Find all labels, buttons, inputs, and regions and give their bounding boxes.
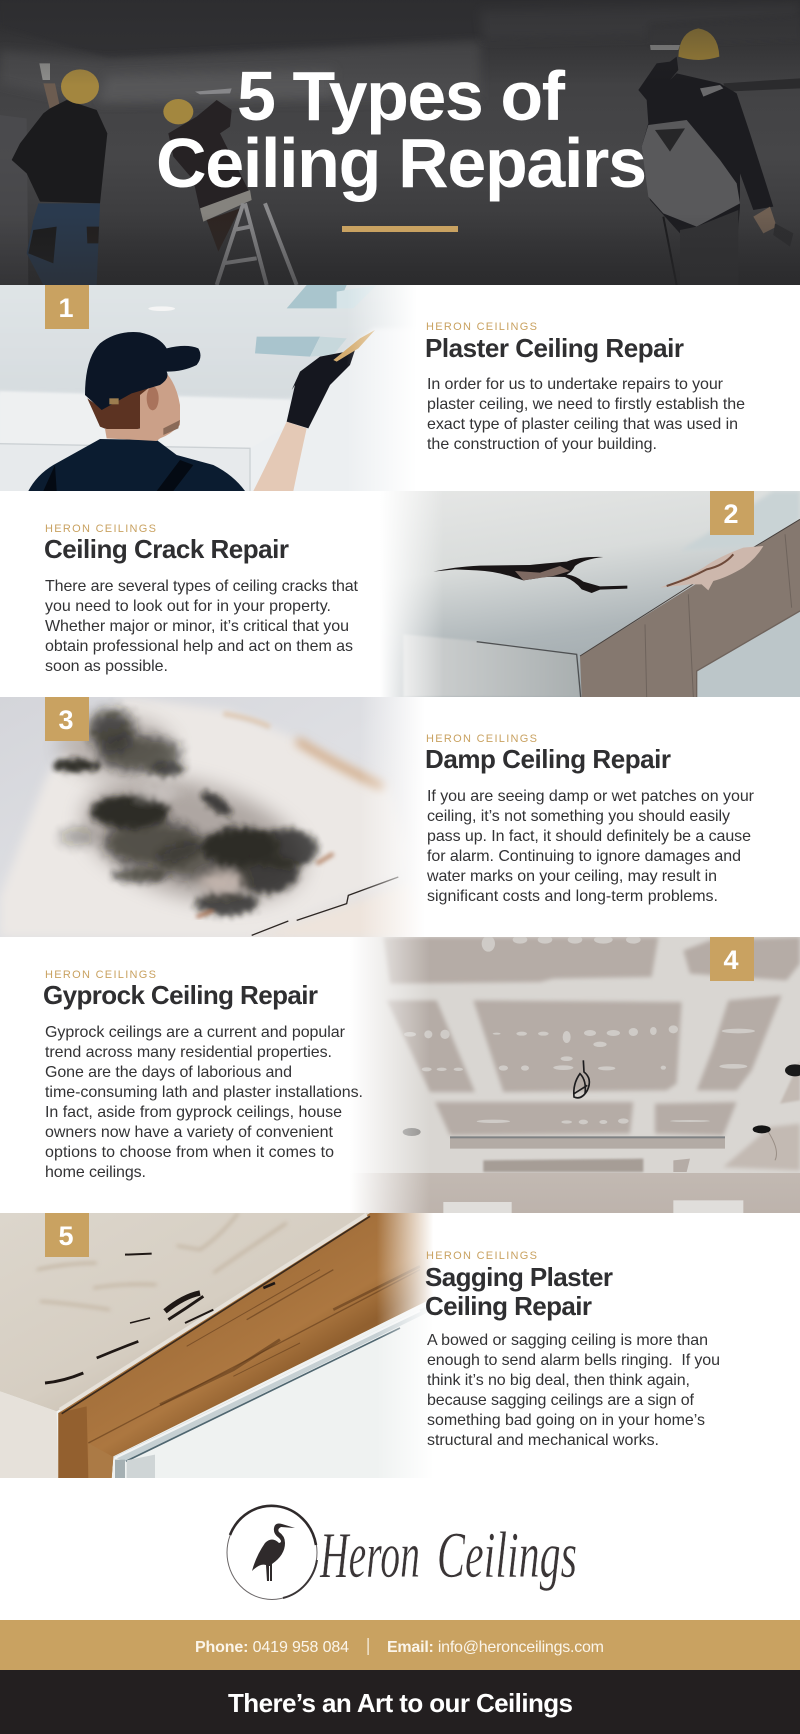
number badge 3: 3 [58,705,74,735]
hanging wire [574,1060,589,1098]
left worker [12,63,107,285]
section 1 text: Plaster Ceiling Repair [425,333,684,363]
tagline bar [0,1670,800,1734]
section 4 text: options to choose from when it comes to [45,1144,334,1161]
crack [433,557,627,593]
plaster folds [37,1213,287,1310]
contact phone: Phone: 0419 958 084 [195,1639,349,1656]
icon: heron in brush circle [227,1506,317,1600]
section 3 text: Damp Ceiling Repair [425,744,671,774]
section 3: damp ceiling repair [0,697,755,937]
plaster dabs [404,936,755,1124]
separator [368,1638,369,1655]
section 4 text: HERON CEILINGS [45,969,156,981]
damaged ceiling edge [60,1215,367,1410]
section 5 text: HERON CEILINGS [426,1250,537,1262]
section 5 text: enough to send alarm bells ringing. If you [427,1352,720,1369]
timber frame [58,1213,460,1478]
section 5: sagging plaster ceiling repair [0,1213,720,1478]
section 5 text: think it’s no big deal, then think again, [427,1372,690,1389]
contact bar [0,1620,800,1670]
number badge 2: 2 [723,499,739,529]
section 4 text: Gone are the days of laborious and [45,1064,292,1081]
man's head [87,385,160,430]
contact email: Email: info@heronceilings.com [387,1639,604,1656]
number badge 1: 1 [58,293,74,323]
section 5 text: Ceiling Repair [425,1291,592,1321]
number badge 5: 5 [58,1221,74,1251]
section 5 text: structural and mechanical works. [427,1432,659,1449]
section 5 text: Sagging Plaster [425,1262,613,1292]
photo: sagging ceiling over timber window frame [0,1213,431,1478]
section 1 text: exact type of plaster ceiling that was used in [427,416,738,433]
gold divider bar [342,226,458,232]
main title [156,57,647,202]
man's shirt [28,439,245,491]
recessed lip [450,1137,725,1149]
number badge 2 [710,491,754,535]
section 4 text: time-consuming lath and plaster installations. [45,1084,363,1101]
section 2 text: soon as possible. [45,658,168,675]
section 1: plaster ceiling repair [0,275,745,491]
section 3 text: If you are seeing damp or wet patches on your [427,788,755,805]
hero panel [0,0,800,285]
section 2 text: There are several types of ceiling cracks that [45,578,359,595]
section 1 text: In order for us to undertake repairs to your [427,376,724,393]
section 4: gyprock ceiling repair [43,936,800,1213]
section 1 text: plaster ceiling, we need to firstly establish the [427,396,745,413]
photo: cracked ceiling corner [386,491,800,697]
crack in sheet [252,877,398,935]
wood grain [160,1266,420,1405]
section 2 text: Whether major or minor, it’s critical that you [45,618,349,635]
photo: plasterer with cap [0,285,400,491]
logo: Heron Ceilings [227,1506,577,1600]
section 2: ceiling crack repair [44,491,800,697]
section 2 text: Ceiling Crack Repair [44,534,289,564]
torn plaster [660,546,763,590]
middle worker on ladder [163,88,297,285]
section 4 text: trend across many residential properties. [45,1044,332,1061]
section 4 text: Gyprock Ceiling Repair [43,980,318,1010]
section 5 text: A bowed or sagging ceiling is more than [427,1332,708,1349]
section 4 text: Gyprock ceilings are a current and popular [45,1024,346,1041]
section 5 text: because sagging ceilings are a sign of [427,1392,695,1409]
section 1 text [425,321,745,453]
section 3 text: for alarm. Continuing to ignore damages and [427,848,741,865]
arm and glove [253,422,307,491]
section 3 text: water marks on your ceiling, may result in [426,868,717,885]
section 2 text: obtain professional help and act on them as [45,638,353,655]
logo wordmark [319,1519,577,1592]
mould [53,709,318,924]
section 2 text [44,523,359,675]
main title: Ceiling Repairs [156,124,647,202]
section 1 text: HERON CEILINGS [426,321,537,333]
tagline: There’s an Art to our Ceilings [228,1688,573,1718]
section 3 text: pass up. In fact, it should definitely be a cause [427,828,751,845]
section 4 text: home ceilings. [45,1164,146,1181]
number badge 4 [710,937,754,981]
main title: 5 Types of [237,57,566,135]
section 4 text: owners now have a variety of convenient [45,1124,334,1141]
logo wordmark: Ceilings [437,1519,577,1592]
rust streak [223,714,270,727]
number badge 4: 4 [723,945,739,975]
number badge 5 [45,1213,89,1257]
section 5 text [425,1250,720,1449]
man's cap [85,332,200,410]
section 2 text: you need to look out for in your property. [45,598,331,615]
number badge 3 [45,697,89,741]
photo: gyprock ceiling with jointing [358,937,800,1213]
section 4 text [43,969,363,1181]
section 3 text: ceiling, it’s not something you should easily [427,808,730,825]
right worker [638,28,793,285]
section 3 text: significant costs and long-term problems. [427,888,718,905]
section 3 text [425,733,755,905]
wall [350,1173,800,1213]
hero background photo: plasterers at work [0,0,800,285]
section 3 text: HERON CEILINGS [426,733,537,745]
number badge 1 [45,285,89,329]
section 1 text: the construction of your building. [427,436,657,453]
logo wordmark: Heron [319,1519,420,1592]
section 4 text: In fact, aside from gyprock ceilings, house [45,1104,342,1121]
window trim [113,1303,433,1461]
photo: mouldy damp ceiling [0,697,410,937]
section 2 text: HERON CEILINGS [45,523,156,535]
section 5 text: something bad going on in your home’s [427,1412,705,1429]
